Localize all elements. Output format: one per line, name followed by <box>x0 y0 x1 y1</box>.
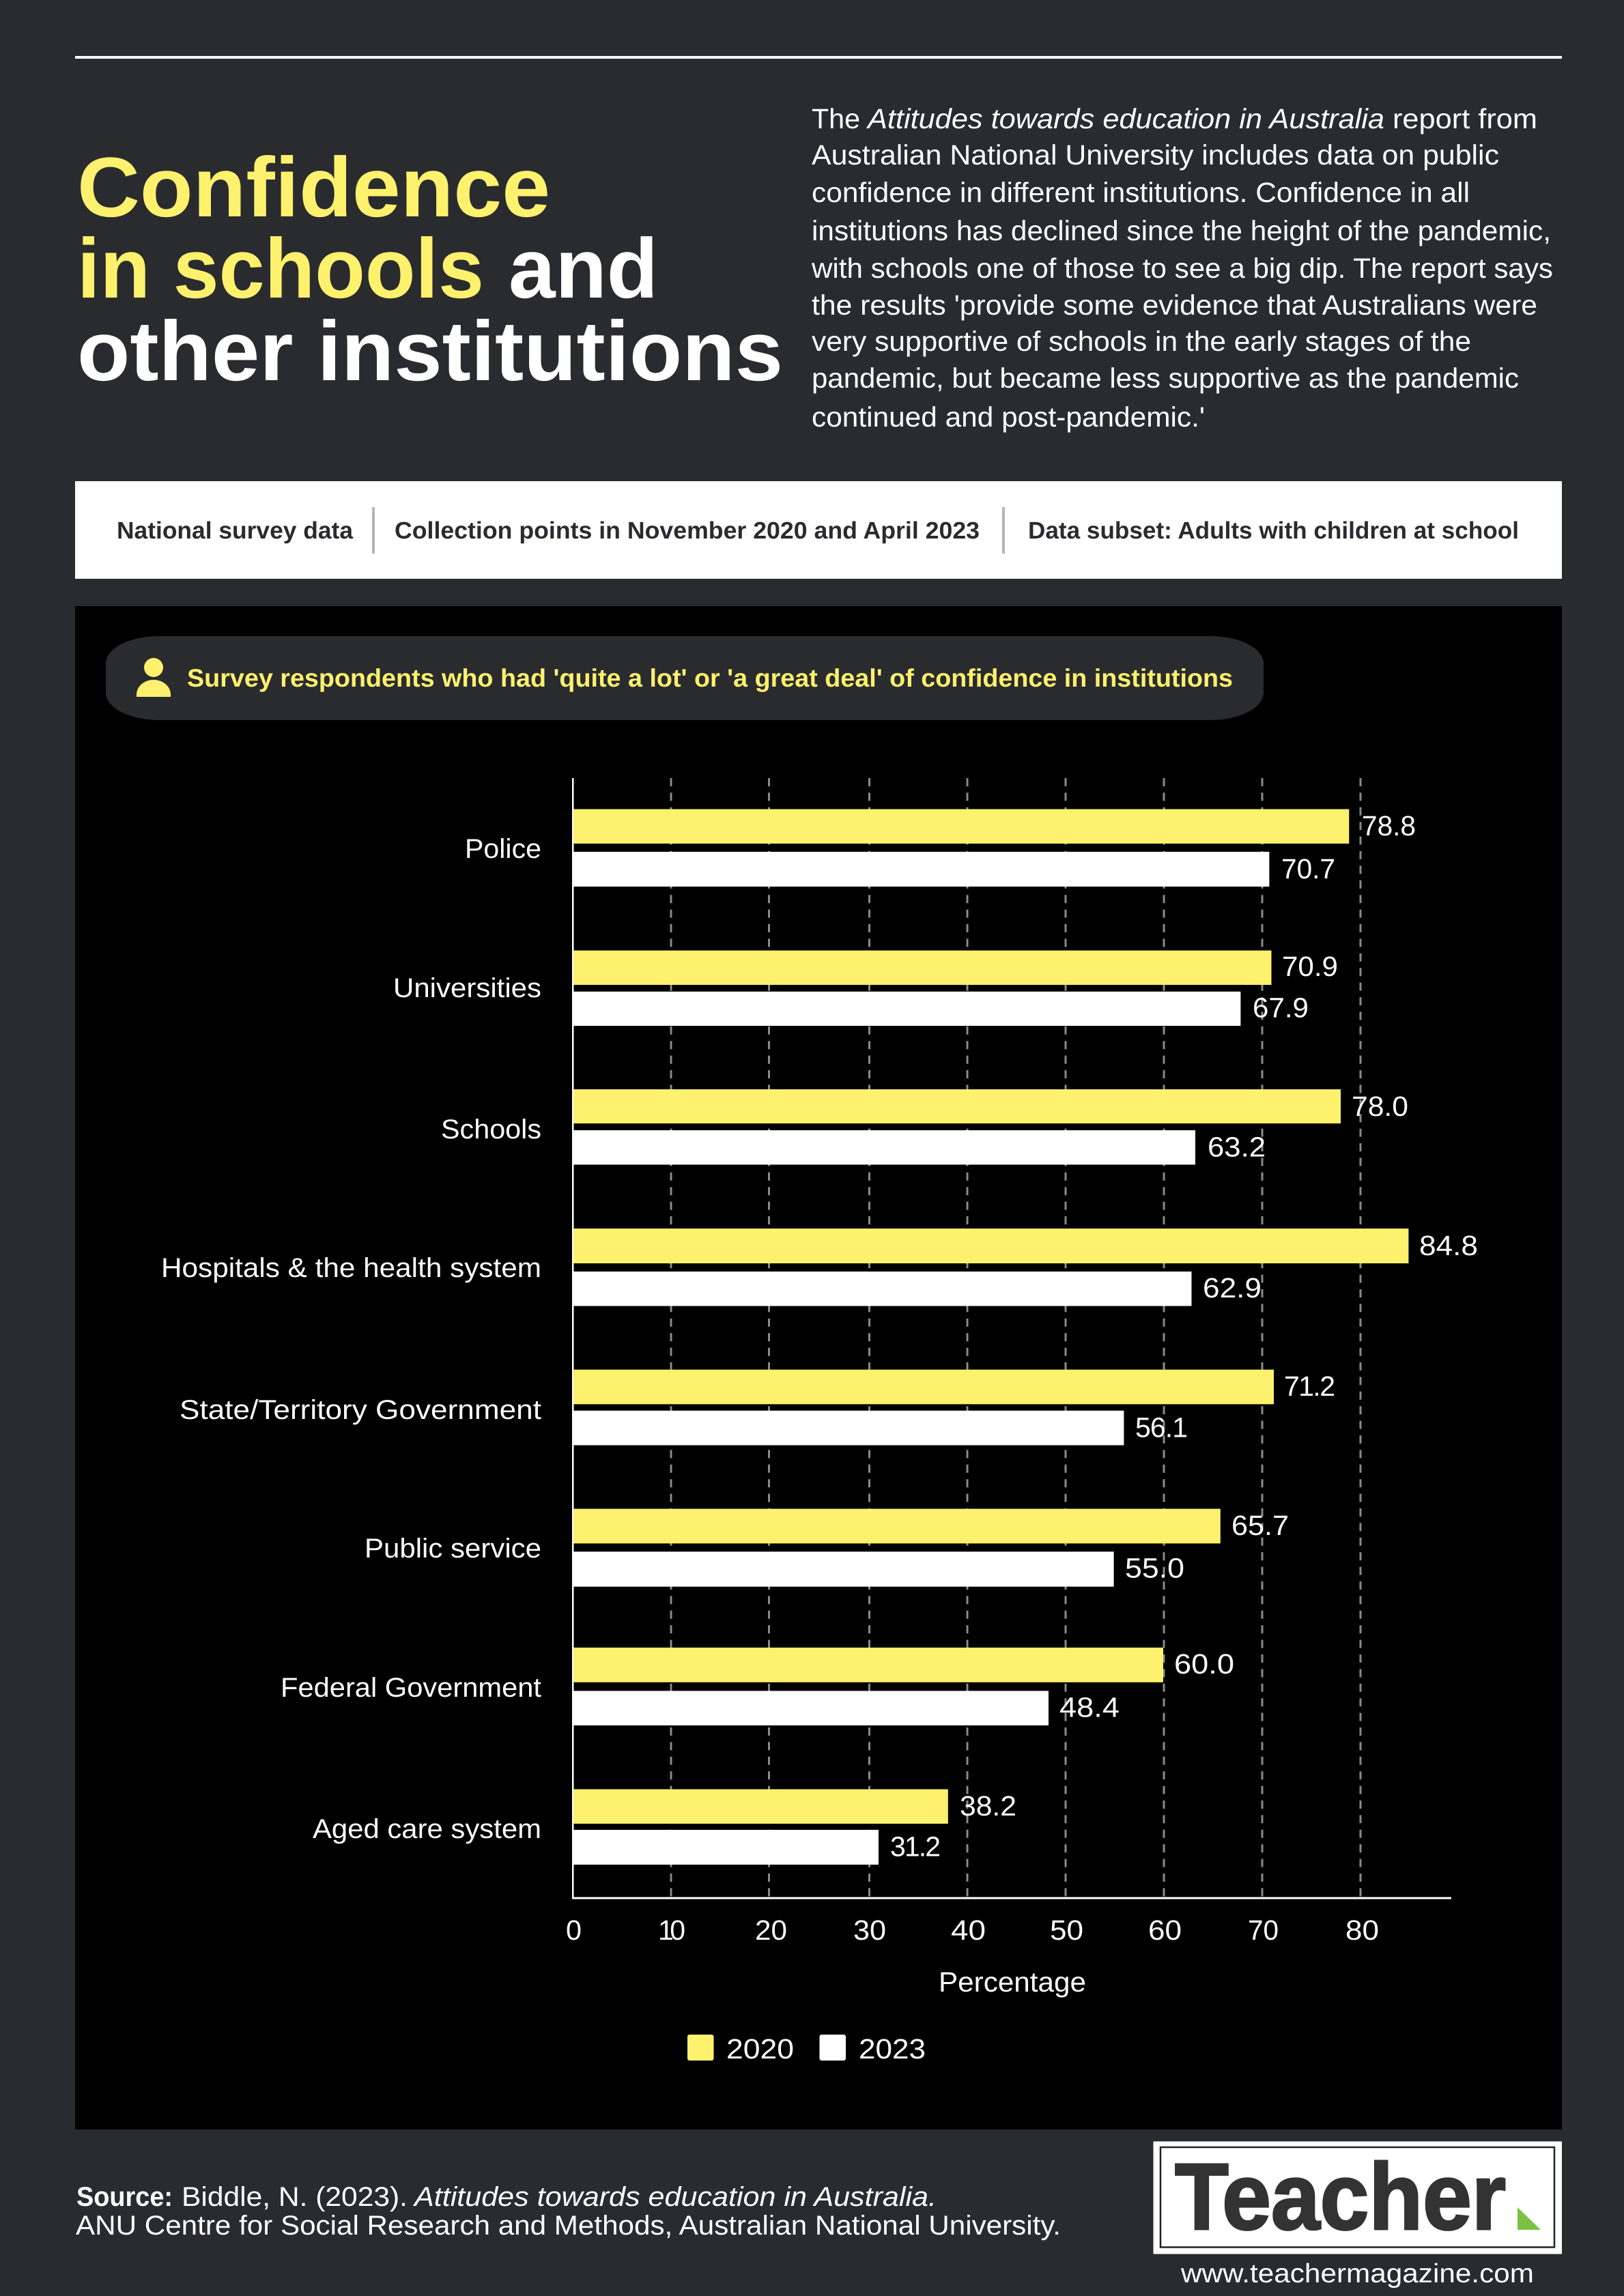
value: 2020: 38.2 <box>960 1790 1016 1822</box>
value: 2023: 48.4 <box>1059 1691 1120 1723</box>
category label: Police <box>465 834 541 864</box>
bar: 2020 <box>573 809 1349 844</box>
value: 2020: 60.0 <box>1174 1648 1234 1680</box>
value: 2020: 84.8 <box>1419 1230 1478 1261</box>
category label: Federal Government <box>281 1673 541 1703</box>
legend item: 2023: 2023 <box>859 2033 926 2065</box>
intro paragraph: institutions has declined since the height of the pandemic, <box>812 215 1551 246</box>
intro paragraph: report from <box>1393 103 1537 134</box>
bar: 2023 <box>573 1551 1114 1587</box>
bar group: Hospitals and the health system <box>161 1229 1478 1306</box>
category label: Aged care system <box>313 1814 541 1844</box>
bar: 2023 <box>573 1691 1049 1725</box>
title <box>77 141 783 399</box>
value: 2023: 62.9 <box>1203 1272 1262 1304</box>
bar group: Federal Government <box>281 1648 1234 1725</box>
intro paragraph: confidence in different institutions. Confidence in all <box>812 177 1470 208</box>
bar group: State/Territory Government <box>180 1370 1335 1446</box>
bar: 2020 <box>573 1509 1221 1543</box>
intro paragraph: Attitudes towards education in Australia <box>866 103 1384 134</box>
source note: Biddle, N. (2023). <box>182 2182 408 2212</box>
category label: Public service <box>365 1534 541 1564</box>
intro paragraph: very supportive of schools in the early stages of the <box>812 326 1471 357</box>
logo: Teacher: Teacher <box>1175 2144 1506 2250</box>
panel: survey details band <box>75 481 1562 579</box>
website url: www.teachermagazine.com <box>1180 2259 1534 2288</box>
value: 2023: 63.2 <box>1208 1132 1266 1163</box>
legend item: 2020: 2020 <box>726 2033 794 2065</box>
chart heading text: Survey respondents who had 'quite a lot' or 'a great deal' of confidence in institutions <box>187 664 1233 692</box>
bar group: Public service <box>365 1509 1289 1587</box>
axis lines <box>572 778 1451 1899</box>
value: 2023: 31.2 <box>890 1831 941 1862</box>
x-axis tick labels <box>566 1914 1379 1946</box>
intro paragraph: with schools one of those to see a big dip. The report says <box>811 253 1553 284</box>
source note: Source: <box>76 2182 173 2212</box>
value: 2020: 70.9 <box>1282 951 1338 982</box>
x-axis title: Percentage <box>939 1966 1086 1998</box>
bar: 2023 <box>573 1830 879 1865</box>
bar: 2020 <box>573 951 1271 985</box>
category label: Schools <box>441 1115 541 1145</box>
title: in schools <box>77 222 484 316</box>
title: Confidence <box>77 141 550 235</box>
x-axis tick labels: 20 <box>755 1914 787 1946</box>
bar group: Schools <box>441 1089 1408 1164</box>
intro paragraph: The <box>812 103 860 134</box>
intro paragraph <box>811 103 1553 433</box>
intro paragraph: pandemic, but became less supportive as the pandemic <box>812 362 1519 394</box>
bar group: Aged care system <box>313 1790 1016 1865</box>
bar: 2020 <box>573 1089 1341 1123</box>
bar group: Police <box>465 809 1416 887</box>
bar group: Universities <box>393 951 1338 1026</box>
category label: Hospitals & the health system <box>161 1253 541 1283</box>
x-axis tick labels: 70 <box>1248 1914 1279 1946</box>
bar: 2023 <box>573 1272 1192 1306</box>
intro paragraph: continued and post-pandemic.' <box>812 401 1205 433</box>
x-axis tick labels: 80 <box>1345 1914 1379 1946</box>
icon: person <box>137 658 171 697</box>
bar: 2020 <box>573 1790 948 1824</box>
value: 2020: 71.2 <box>1284 1371 1335 1402</box>
source note: Attitudes towards education in Australia. <box>413 2182 937 2212</box>
legend <box>687 2033 926 2065</box>
value: 2023: 56.1 <box>1135 1411 1188 1443</box>
bar: 2023 <box>573 1411 1124 1446</box>
legend item: 2020 <box>687 2033 794 2065</box>
value: 2020: 78.8 <box>1362 810 1416 842</box>
title: and <box>509 222 658 316</box>
panel: chart <box>75 606 1562 2129</box>
x-axis tick labels: 10 <box>658 1914 685 1946</box>
bar: 2020 <box>573 1370 1274 1404</box>
x-axis tick labels: 30 <box>853 1914 886 1946</box>
x-axis tick labels: 0 <box>566 1914 582 1946</box>
value: 2023: 55.0 <box>1125 1552 1184 1583</box>
value: 2020: 65.7 <box>1231 1510 1289 1541</box>
x-axis tick labels: 40 <box>951 1914 986 1946</box>
value: 2020: 78.0 <box>1352 1091 1408 1122</box>
bar: 2020 <box>573 1648 1163 1682</box>
title: other institutions <box>77 304 783 399</box>
category label: Universities <box>393 973 541 1003</box>
text: national survey data: National survey data <box>117 517 354 544</box>
bar: 2023 <box>573 852 1269 887</box>
source note <box>76 2182 1061 2241</box>
chart heading pill <box>106 636 1264 720</box>
intro paragraph: the results 'provide some evidence that Australians were <box>812 289 1537 321</box>
x-axis tick labels: 60 <box>1148 1914 1182 1946</box>
bar: 2020 <box>573 1229 1408 1263</box>
source note: ANU Centre for Social Research and Methods, Australian National University. <box>76 2211 1061 2241</box>
text: data subset: Data subset: Adults with children at school <box>1028 517 1519 544</box>
bar: 2023 <box>573 992 1240 1026</box>
bar: 2023 <box>573 1130 1195 1164</box>
value: 2023: 67.9 <box>1253 992 1309 1024</box>
value: 2023: 70.7 <box>1281 853 1335 885</box>
category label: State/Territory Government <box>180 1395 541 1425</box>
x-axis tick labels: 50 <box>1050 1914 1083 1946</box>
intro paragraph: Australian National University includes data on public <box>812 139 1499 171</box>
legend item: 2023 <box>819 2033 926 2065</box>
text: collection points: Collection points in November 2020 and April 2023 <box>395 517 980 544</box>
